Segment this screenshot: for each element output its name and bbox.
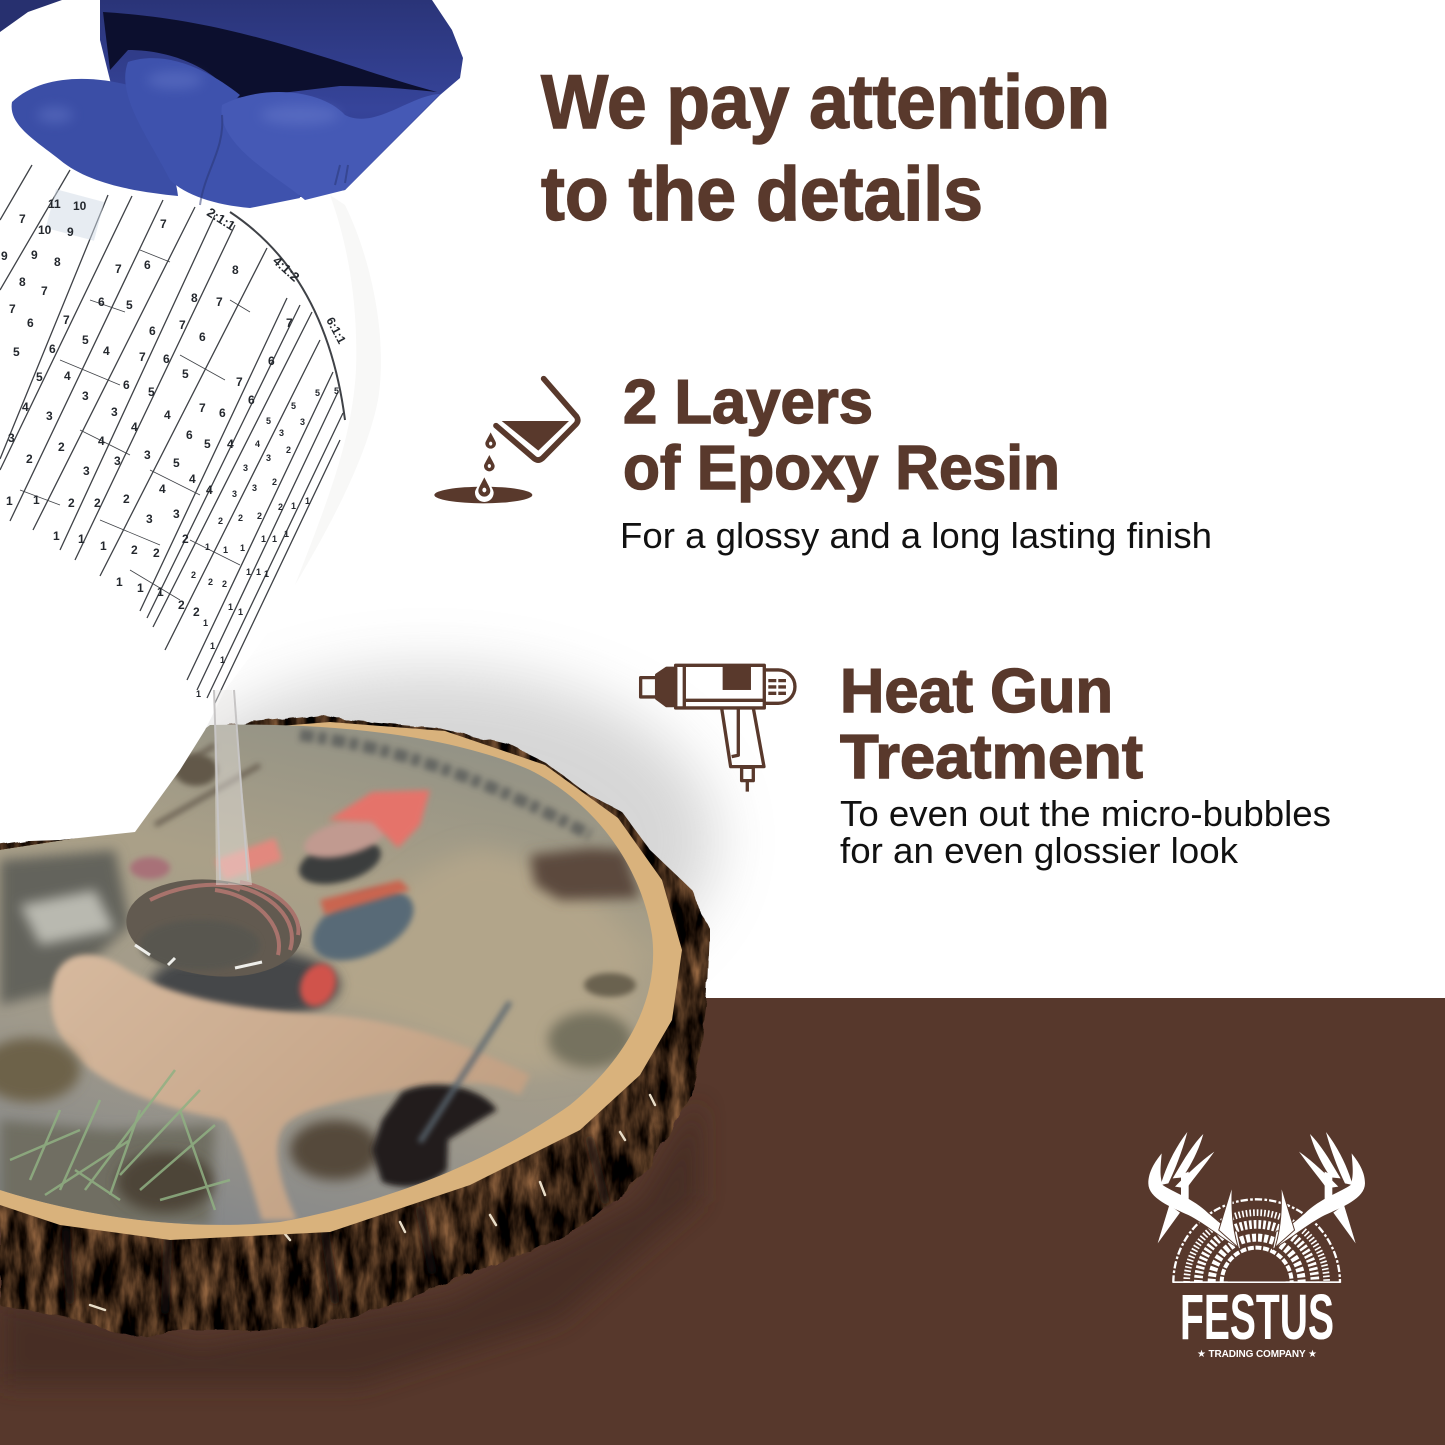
heading: 2 layers of epoxy resin: [623, 368, 1060, 503]
finger crease lines: [200, 115, 348, 205]
top left glove piece: [0, 0, 62, 32]
cup measurement numbers: 1: [100, 539, 107, 553]
resin pour stream: [214, 690, 252, 885]
dog body: [51, 955, 530, 1220]
logo wordmark: FESTUS: [1180, 1281, 1334, 1353]
pink arm: [130, 857, 170, 879]
dense numbers near cup edge: 1: [264, 569, 269, 579]
bark edge of wood slice: [0, 714, 710, 1338]
cup measurement numbers: 7: [216, 295, 223, 309]
cup measurement numbers: 10: [38, 223, 52, 237]
soft shadow behind product: [145, 670, 715, 1010]
cup measurement numbers: 2: [58, 440, 65, 454]
dense numbers near cup edge: 1: [256, 567, 261, 577]
heading: 2 layers of epoxy resin: 2 Layers: [623, 368, 873, 437]
cup measurement numbers: 6: [248, 393, 255, 407]
dense numbers near cup edge: 1: [272, 534, 277, 544]
dense numbers near cup edge: 1: [210, 641, 215, 651]
brown grass patch lower left: [0, 1038, 80, 1102]
cup measurement numbers: 3: [111, 405, 118, 419]
text: micro-bubbles: [840, 793, 1331, 871]
cup measurement numbers: 3: [82, 389, 89, 403]
cup measurement numbers: 3: [46, 409, 53, 423]
knot on the far left edge: [0, 825, 23, 841]
dense numbers near cup edge: 1: [220, 655, 225, 665]
cup measurement numbers: 3: [83, 464, 90, 478]
brush under dog: [290, 1120, 380, 1180]
text: glossy finish: For a glossy and a long lasting finish: [620, 515, 1212, 556]
dense numbers near cup edge: 2: [218, 516, 223, 526]
cup measurement numbers: 4: [103, 344, 110, 358]
cup measurement numbers: 7: [115, 262, 122, 276]
dense numbers near cup edge: [191, 386, 339, 699]
cup measurement numbers: 4: [164, 408, 171, 422]
cup measurement numbers: 8: [19, 275, 26, 289]
cup white body: [0, 130, 386, 842]
cup measurement numbers: [1, 197, 293, 619]
body inner divider: [684, 665, 764, 708]
handle inner line: [732, 708, 738, 757]
cup ratio labels: [204, 205, 349, 346]
shadow of log on brown band: [0, 1100, 700, 1385]
dense numbers near cup edge: 2: [191, 570, 196, 580]
cup ratio labels: 4:1:2: [270, 253, 303, 285]
dark gap between palm and fingers: [103, 12, 437, 98]
dense numbers near cup edge: 2: [222, 579, 227, 589]
cup measurement numbers: 7: [286, 316, 293, 330]
cup measurement numbers: 2: [131, 543, 138, 557]
leaf patch right: [584, 973, 636, 997]
dense numbers near cup edge: 3: [252, 483, 257, 493]
cup measurement numbers: 6: [199, 330, 206, 344]
right antler: [1273, 1132, 1365, 1248]
dense numbers near cup edge: 5: [334, 386, 339, 396]
paper tab: [0, 22, 125, 82]
rear vent housing: [765, 670, 795, 703]
cord guard: [742, 767, 753, 781]
vent slots: [768, 681, 786, 693]
cup measurement numbers: 5: [13, 345, 20, 359]
icon: pouring beaker: [434, 379, 578, 503]
drop outline ring: [475, 475, 494, 502]
cup measurement numbers: 7: [199, 401, 206, 415]
text: micro-bubbles: for an even glossier look: [840, 830, 1239, 871]
red hat: [328, 790, 430, 848]
dense numbers near cup edge: 3: [300, 417, 305, 427]
cup measurement numbers: 9: [1, 249, 8, 263]
cup measurement numbers: 6: [163, 352, 170, 366]
cup measurement numbers: 6: [144, 258, 151, 272]
title: [541, 60, 1110, 237]
tan ground: [334, 851, 624, 1072]
cup measurement numbers: 4: [131, 420, 138, 434]
orange sleeve: [215, 838, 282, 880]
product photo: wooden slice with printed photo: [0, 714, 710, 1338]
dense numbers near cup edge: 3: [232, 489, 237, 499]
palm: [100, 0, 463, 197]
dense numbers near cup edge: 1: [240, 543, 245, 553]
cup measurement numbers: 2: [26, 452, 33, 466]
cup measurement numbers: 2: [178, 598, 185, 612]
heat gun nozzle tip: [641, 678, 657, 697]
resin pile with pink stripes: [126, 879, 302, 976]
cup measurement numbers: 5: [126, 298, 133, 312]
cup measurement numbers: 3: [114, 454, 121, 468]
cup measurement numbers: 3: [173, 507, 180, 521]
cup measurement numbers: 5: [148, 385, 155, 399]
cup measurement numbers: 1: [137, 581, 144, 595]
light wood rim: [0, 722, 682, 1240]
cup measurement numbers: 7: [160, 217, 167, 231]
cup measurement numbers: 3: [144, 448, 151, 462]
cup measurement numbers: 8: [191, 291, 198, 305]
resin drop middle: [484, 455, 495, 471]
beaker outline: [496, 379, 578, 460]
dark under-pile shadow: [150, 949, 340, 1021]
cup measurement numbers: 1: [6, 494, 13, 508]
heat gun body: [676, 665, 764, 708]
blurred printed caption: [300, 735, 590, 835]
bark gaps and gloss: [66, 1095, 655, 1310]
cup measurement numbers: 2: [94, 496, 101, 510]
dense numbers near cup edge: 2: [272, 477, 277, 487]
cup measurement numbers: 4: [64, 369, 71, 383]
dense numbers near cup edge: 3: [243, 463, 248, 473]
cup measurement numbers: 7: [9, 302, 16, 316]
red glove: [296, 960, 339, 1010]
dense numbers near cup edge: 3: [279, 428, 284, 438]
dense numbers near cup edge: 5: [291, 401, 296, 411]
cup measurement numbers: 6: [98, 295, 105, 309]
cup ratio labels: 2:1:1: [204, 205, 238, 233]
middle finger: [221, 92, 440, 200]
dense numbers near cup edge: 1: [261, 534, 266, 544]
cup measurement numbers: 8: [54, 255, 61, 269]
dense numbers near cup edge: 1: [205, 542, 210, 552]
leaf patch upper right: [530, 848, 640, 900]
heading: heat gun treatment: Heat Gun: [840, 657, 1113, 726]
cup measurement numbers: 3: [146, 512, 153, 526]
cup measurement numbers: 6: [268, 354, 275, 368]
dense numbers near cup edge: 2: [208, 577, 213, 587]
control panel: [723, 667, 751, 690]
index finger: [125, 58, 300, 208]
text: micro-bubbles: To even out the micro-bubbles: [840, 793, 1331, 834]
logo tagline: ★ TRADING COMPANY ★: [1197, 1349, 1317, 1360]
cup measurement numbers: 1: [78, 532, 85, 546]
dark brown bush: [117, 1152, 213, 1212]
dense numbers near cup edge: 2: [257, 511, 262, 521]
cup measurement numbers: 7: [179, 318, 186, 332]
cup measurement numbers: 1: [33, 493, 40, 507]
cup measurement numbers: 7: [139, 350, 146, 364]
printed resin surface: [0, 724, 654, 1225]
orange vest: [320, 880, 410, 915]
heading: heat gun treatment: Treatment: [840, 723, 1143, 792]
hunter jacket: [309, 891, 417, 964]
brown lower band: [0, 998, 1445, 1445]
resin drop top: [485, 432, 496, 449]
dense numbers near cup edge: 1: [223, 545, 228, 555]
measurement grid lines: [0, 165, 345, 705]
dense numbers near cup edge: 1: [196, 689, 201, 699]
cup measurement numbers: 4: [22, 400, 29, 414]
title: We pay attention: [541, 60, 1110, 145]
dark ground at bottom left: [0, 1120, 215, 1225]
left dark scene: [0, 850, 130, 1005]
cup measurement numbers: 6: [149, 324, 156, 338]
dense numbers near cup edge: 4: [255, 439, 260, 449]
blue gloved hand: [0, 0, 463, 208]
cup measurement numbers: 2: [123, 492, 130, 506]
measuring cup: [0, 130, 386, 842]
cup measurement numbers: 9: [67, 225, 74, 239]
cup measurement numbers: 7: [19, 212, 26, 226]
cup measurement numbers: 1: [116, 575, 123, 589]
icon: heat gun: [641, 665, 795, 792]
heat gun nozzle cone: [657, 668, 676, 706]
cup measurement numbers: 4: [206, 483, 213, 497]
finger highlights: [37, 71, 340, 125]
dense numbers near cup edge: 1: [305, 496, 310, 506]
resin in beaker: [502, 421, 569, 451]
dense numbers near cup edge: 1: [291, 501, 296, 511]
grass blades: [10, 1070, 230, 1210]
cup measurement numbers: 3: [8, 431, 15, 445]
cup measurement numbers: 5: [36, 370, 43, 384]
cup measurement numbers: 7: [236, 375, 243, 389]
cup measurement numbers: 9: [31, 248, 38, 262]
dense numbers near cup edge: 2: [286, 445, 291, 455]
cup measurement numbers: 5: [204, 437, 211, 451]
pale object left: [20, 890, 115, 945]
dense numbers near cup edge: 3: [266, 453, 271, 463]
cup measurement numbers: 8: [232, 263, 239, 277]
cup measurement numbers: 2: [68, 496, 75, 510]
hunter beard: [296, 842, 384, 888]
cup measurement numbers: 4: [227, 437, 234, 451]
cup measurement numbers: 4: [189, 472, 196, 486]
cup measurement numbers: 11: [48, 197, 61, 211]
cup measurement numbers: 7: [63, 313, 70, 327]
cup measurement numbers: 4: [98, 434, 105, 448]
cup measurement numbers: 6: [27, 316, 34, 330]
heading: 2 layers of epoxy resin: of Epoxy Resin: [623, 434, 1060, 503]
logo: festus trading company: [1148, 1132, 1365, 1360]
dense numbers near cup edge: 5: [266, 416, 271, 426]
cup measurement numbers: 5: [182, 367, 189, 381]
cup measurement numbers: 1: [157, 585, 164, 599]
handle: [722, 708, 764, 767]
brown patch top: [174, 754, 218, 786]
rifle: [420, 1002, 510, 1142]
cup measurement numbers: 5: [82, 333, 89, 347]
cup rim soft shade: [295, 195, 381, 585]
cup ratio labels: 6:1:1: [323, 315, 349, 346]
cup measurement numbers: 2: [193, 605, 200, 619]
dense numbers near cup edge: 2: [278, 502, 283, 512]
resin drop bottom: [478, 477, 490, 497]
dense numbers near cup edge: 1: [246, 567, 251, 577]
left antler: [1148, 1132, 1240, 1248]
thumb: [12, 79, 178, 196]
blue tinted mark behind numbers: [46, 189, 104, 241]
cup measurement numbers: 2: [153, 546, 160, 560]
hunter face: [304, 820, 384, 862]
logo turkey fan and antlers: [1148, 1132, 1365, 1283]
heading: heat gun treatment: [840, 657, 1143, 792]
dense numbers near cup edge: 1: [203, 618, 208, 628]
fan inner arch: [1228, 1263, 1286, 1281]
cup measurement numbers: 6: [123, 378, 130, 392]
cup measurement numbers: 7: [41, 284, 48, 298]
fan base line: [1173, 1281, 1341, 1283]
puddle: [434, 487, 532, 503]
cup measurement numbers: 2: [182, 532, 189, 546]
dense numbers near cup edge: 2: [238, 513, 243, 523]
cord: [742, 781, 752, 792]
cup measurement numbers: 6: [49, 342, 56, 356]
cup measurement numbers: 1: [53, 529, 60, 543]
cup measurement numbers: 6: [186, 428, 193, 442]
turkey fan: [1173, 1199, 1340, 1283]
cup measurement numbers: 5: [173, 456, 180, 470]
dense numbers near cup edge: 1: [228, 602, 233, 612]
dense numbers near cup edge: 5: [315, 388, 320, 398]
dense numbers near cup edge: 1: [284, 529, 289, 539]
cup measurement numbers: 10: [73, 199, 87, 213]
dense numbers near cup edge: 1: [238, 607, 243, 617]
title: to the details: [541, 152, 983, 237]
black dog: [372, 1085, 497, 1186]
cup measurement numbers: 4: [159, 482, 166, 496]
leaf patch lower right: [548, 1012, 632, 1068]
stool frame: [145, 745, 260, 825]
cup measurement numbers: 6: [219, 406, 226, 420]
